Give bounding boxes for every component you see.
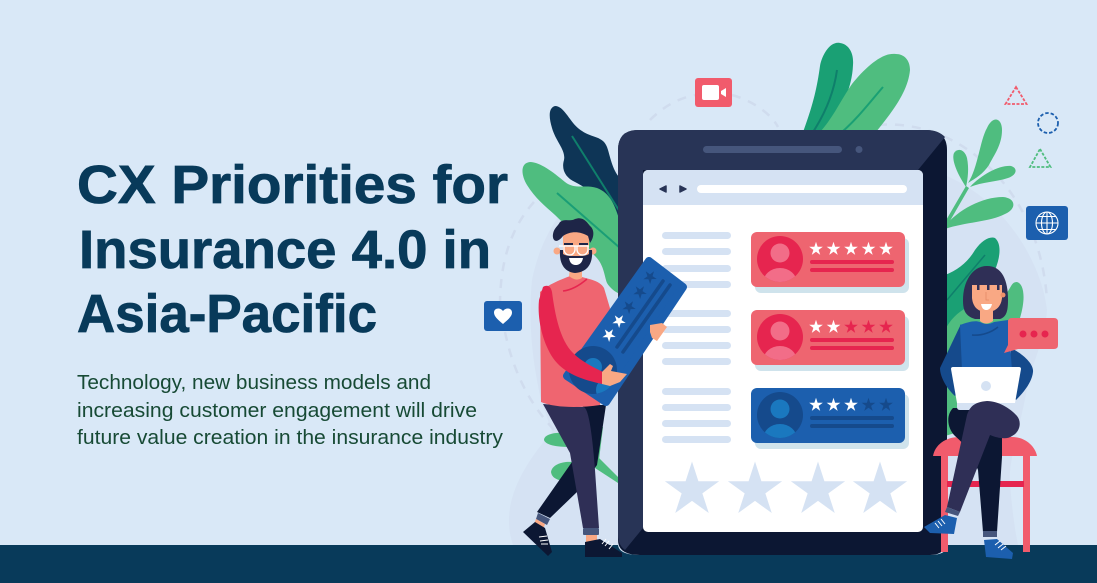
- woman: cuffs: [945, 507, 997, 537]
- leaves: behind woman: [945, 238, 1024, 436]
- woman: neck: [980, 310, 993, 324]
- man: [523, 218, 683, 557]
- woman: face: [972, 285, 1002, 312]
- woman: back leg: [948, 408, 1002, 532]
- title: [77, 155, 508, 344]
- tablet: dark side shell: [618, 130, 947, 555]
- man: brows: [564, 243, 588, 245]
- tablet: screen: [643, 170, 923, 532]
- man: face: [563, 232, 589, 256]
- man: hair: [553, 218, 593, 243]
- man: smile: [569, 258, 583, 265]
- woman: [924, 266, 1058, 559]
- tablet: [618, 130, 947, 555]
- leaves: top: [803, 43, 910, 132]
- title: Asia-Pacific: [77, 284, 377, 344]
- man: beard: [560, 250, 592, 273]
- woman: bangs: [977, 284, 1000, 290]
- tablet: lighter face: [618, 130, 945, 550]
- woman: shoes: [924, 515, 1013, 559]
- man: hands: [602, 323, 667, 386]
- woman's chair: [933, 437, 1037, 552]
- subtitle: future value creation in the insurance industry: [77, 427, 503, 449]
- dashed shape: green triangle: [1030, 149, 1050, 167]
- leaf: navy: [550, 106, 620, 225]
- review card: three stars: [751, 388, 909, 454]
- dashed shape: red triangle: [1006, 87, 1026, 104]
- man: glasses: [559, 246, 589, 255]
- woman: nose: [986, 292, 989, 300]
- woman: laptop: [951, 367, 1021, 410]
- title: Insurance 4.0 in: [79, 220, 491, 280]
- man: rating card: [567, 261, 683, 403]
- tablet: camera: [856, 146, 862, 153]
- subtitle: [77, 372, 503, 449]
- woman: back hair: [963, 266, 1008, 319]
- large rating stars: [665, 462, 907, 513]
- review card: two stars: [751, 310, 909, 376]
- man: shirt: [540, 275, 612, 407]
- woman: speech bubble: [1004, 318, 1058, 353]
- subtitle: increasing customer engagement will drive: [77, 400, 477, 422]
- man: ears: [554, 248, 596, 254]
- woman: top: [960, 320, 1012, 370]
- icon: globe badge: [1026, 206, 1068, 240]
- woman: smile: [981, 304, 992, 310]
- tablet: browser bar: [643, 170, 923, 205]
- man: neck: [569, 268, 582, 280]
- man: front leg: [543, 404, 599, 528]
- icon: heart badge: [484, 301, 522, 331]
- tablet: speaker: [703, 146, 842, 153]
- leaf: green left: [522, 162, 620, 294]
- title: CX Priorities for: [77, 155, 508, 215]
- subtitle: Technology, new business models and: [77, 372, 431, 394]
- woman: crossed leg: [947, 401, 1020, 512]
- man: back leg: [537, 405, 606, 518]
- background blob: [509, 165, 1047, 545]
- icon: video badge: [695, 78, 732, 107]
- dashed shape: blue circle: [1038, 113, 1058, 133]
- list lines: [662, 232, 731, 443]
- man: cuffs: [536, 513, 599, 535]
- dashed orbit: [500, 95, 1047, 432]
- man: shoes: [523, 522, 622, 557]
- man: arm: [539, 286, 603, 384]
- review card: five stars: [751, 232, 909, 298]
- man: ankles: [534, 519, 597, 542]
- woman: arms: [940, 324, 1033, 400]
- leaves: right sprig: [945, 120, 1016, 229]
- ground bar: [0, 545, 1097, 583]
- leaves: behind man: [544, 427, 618, 483]
